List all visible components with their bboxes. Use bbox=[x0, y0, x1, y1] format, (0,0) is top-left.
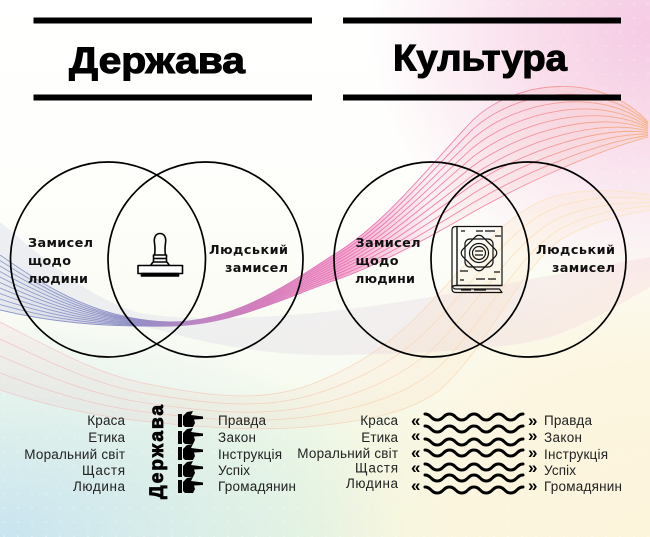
list: state right values: Правда bbox=[218, 413, 266, 428]
panel: state venn diagram bbox=[10, 162, 303, 357]
text: human design, culture: замисел bbox=[552, 261, 615, 276]
list: culture left values: Людина bbox=[346, 476, 398, 491]
icon: book bbox=[452, 226, 502, 292]
icons: closing guillemets: » bbox=[528, 411, 537, 430]
text: state design of man bbox=[28, 236, 93, 287]
list: culture right values: Громадянин bbox=[544, 479, 622, 494]
text: state design of man: щодо bbox=[28, 254, 71, 269]
text: human design, state: Людський bbox=[209, 243, 288, 258]
list: state right values: Успіх bbox=[218, 463, 250, 478]
list: culture left values: Моральний світ bbox=[297, 446, 398, 461]
text: human design, culture: Людський bbox=[536, 243, 615, 258]
list: state left values bbox=[24, 413, 125, 494]
icons: closing guillemets: » bbox=[528, 426, 537, 445]
panel: Держава header bbox=[34, 18, 312, 100]
icons: opening guillemets: « bbox=[411, 443, 420, 462]
list: culture left values: Краса bbox=[360, 413, 398, 428]
icons: opening guillemets: « bbox=[411, 411, 420, 430]
list: culture left values: Щастя bbox=[355, 460, 398, 476]
list: culture left values bbox=[297, 413, 398, 491]
text: human design, state: замисел bbox=[225, 261, 288, 276]
icons: closing guillemets bbox=[528, 411, 537, 495]
list: culture right values: Інструкція bbox=[544, 447, 608, 462]
list: state right values: Інструкція bbox=[218, 447, 282, 462]
list: state left values: Моральний світ bbox=[24, 447, 125, 462]
list: culture left values: Етика bbox=[361, 430, 398, 445]
text: culture design of man bbox=[355, 236, 420, 287]
text: culture design of man: людини bbox=[355, 272, 415, 287]
text: human design, culture bbox=[536, 243, 615, 276]
text: culture design of man: Замисел bbox=[356, 236, 420, 251]
text: human design, state bbox=[209, 243, 288, 276]
heading: Держава: Держава bbox=[69, 40, 245, 81]
list: state left values: Етика bbox=[88, 430, 125, 445]
icons: opening guillemets bbox=[411, 411, 420, 495]
list: state left values: Людина bbox=[73, 479, 125, 494]
list: state right values: Закон bbox=[218, 430, 256, 445]
icons: pointing hands bbox=[178, 411, 203, 493]
vertical label: Держава: Держава bbox=[147, 405, 168, 499]
icons: closing guillemets: » bbox=[528, 458, 537, 477]
heading: Культура: Культура bbox=[393, 38, 567, 78]
icons: opening guillemets: « bbox=[411, 476, 420, 495]
list: culture right values: Закон bbox=[544, 430, 582, 445]
text: culture design of man: щодо bbox=[356, 254, 399, 269]
list: culture right values: Правда bbox=[544, 413, 592, 428]
list: culture right values: Успіх bbox=[544, 463, 576, 478]
list: state left values: Краса bbox=[87, 413, 125, 428]
list: culture right values bbox=[544, 413, 622, 494]
list: state right values: Громадянин bbox=[218, 479, 296, 494]
panel: Культура header bbox=[343, 18, 621, 100]
icons: closing guillemets: » bbox=[528, 443, 537, 462]
wave ribbons background bbox=[0, 86, 650, 429]
icons: wavy lines bbox=[425, 414, 523, 493]
icons: opening guillemets: « bbox=[411, 458, 420, 477]
icons: closing guillemets: » bbox=[528, 476, 537, 495]
list: state left values: Щастя bbox=[82, 463, 125, 478]
list: state right values bbox=[218, 413, 296, 494]
text: state design of man: Замисел bbox=[28, 236, 93, 251]
icons: opening guillemets: « bbox=[411, 426, 420, 445]
panel: culture comparison list bbox=[297, 411, 622, 495]
text: state design of man: людини bbox=[28, 272, 88, 287]
panel: culture venn diagram bbox=[334, 162, 626, 357]
panel: state comparison list bbox=[24, 405, 296, 499]
icon: stamp bbox=[138, 234, 182, 276]
